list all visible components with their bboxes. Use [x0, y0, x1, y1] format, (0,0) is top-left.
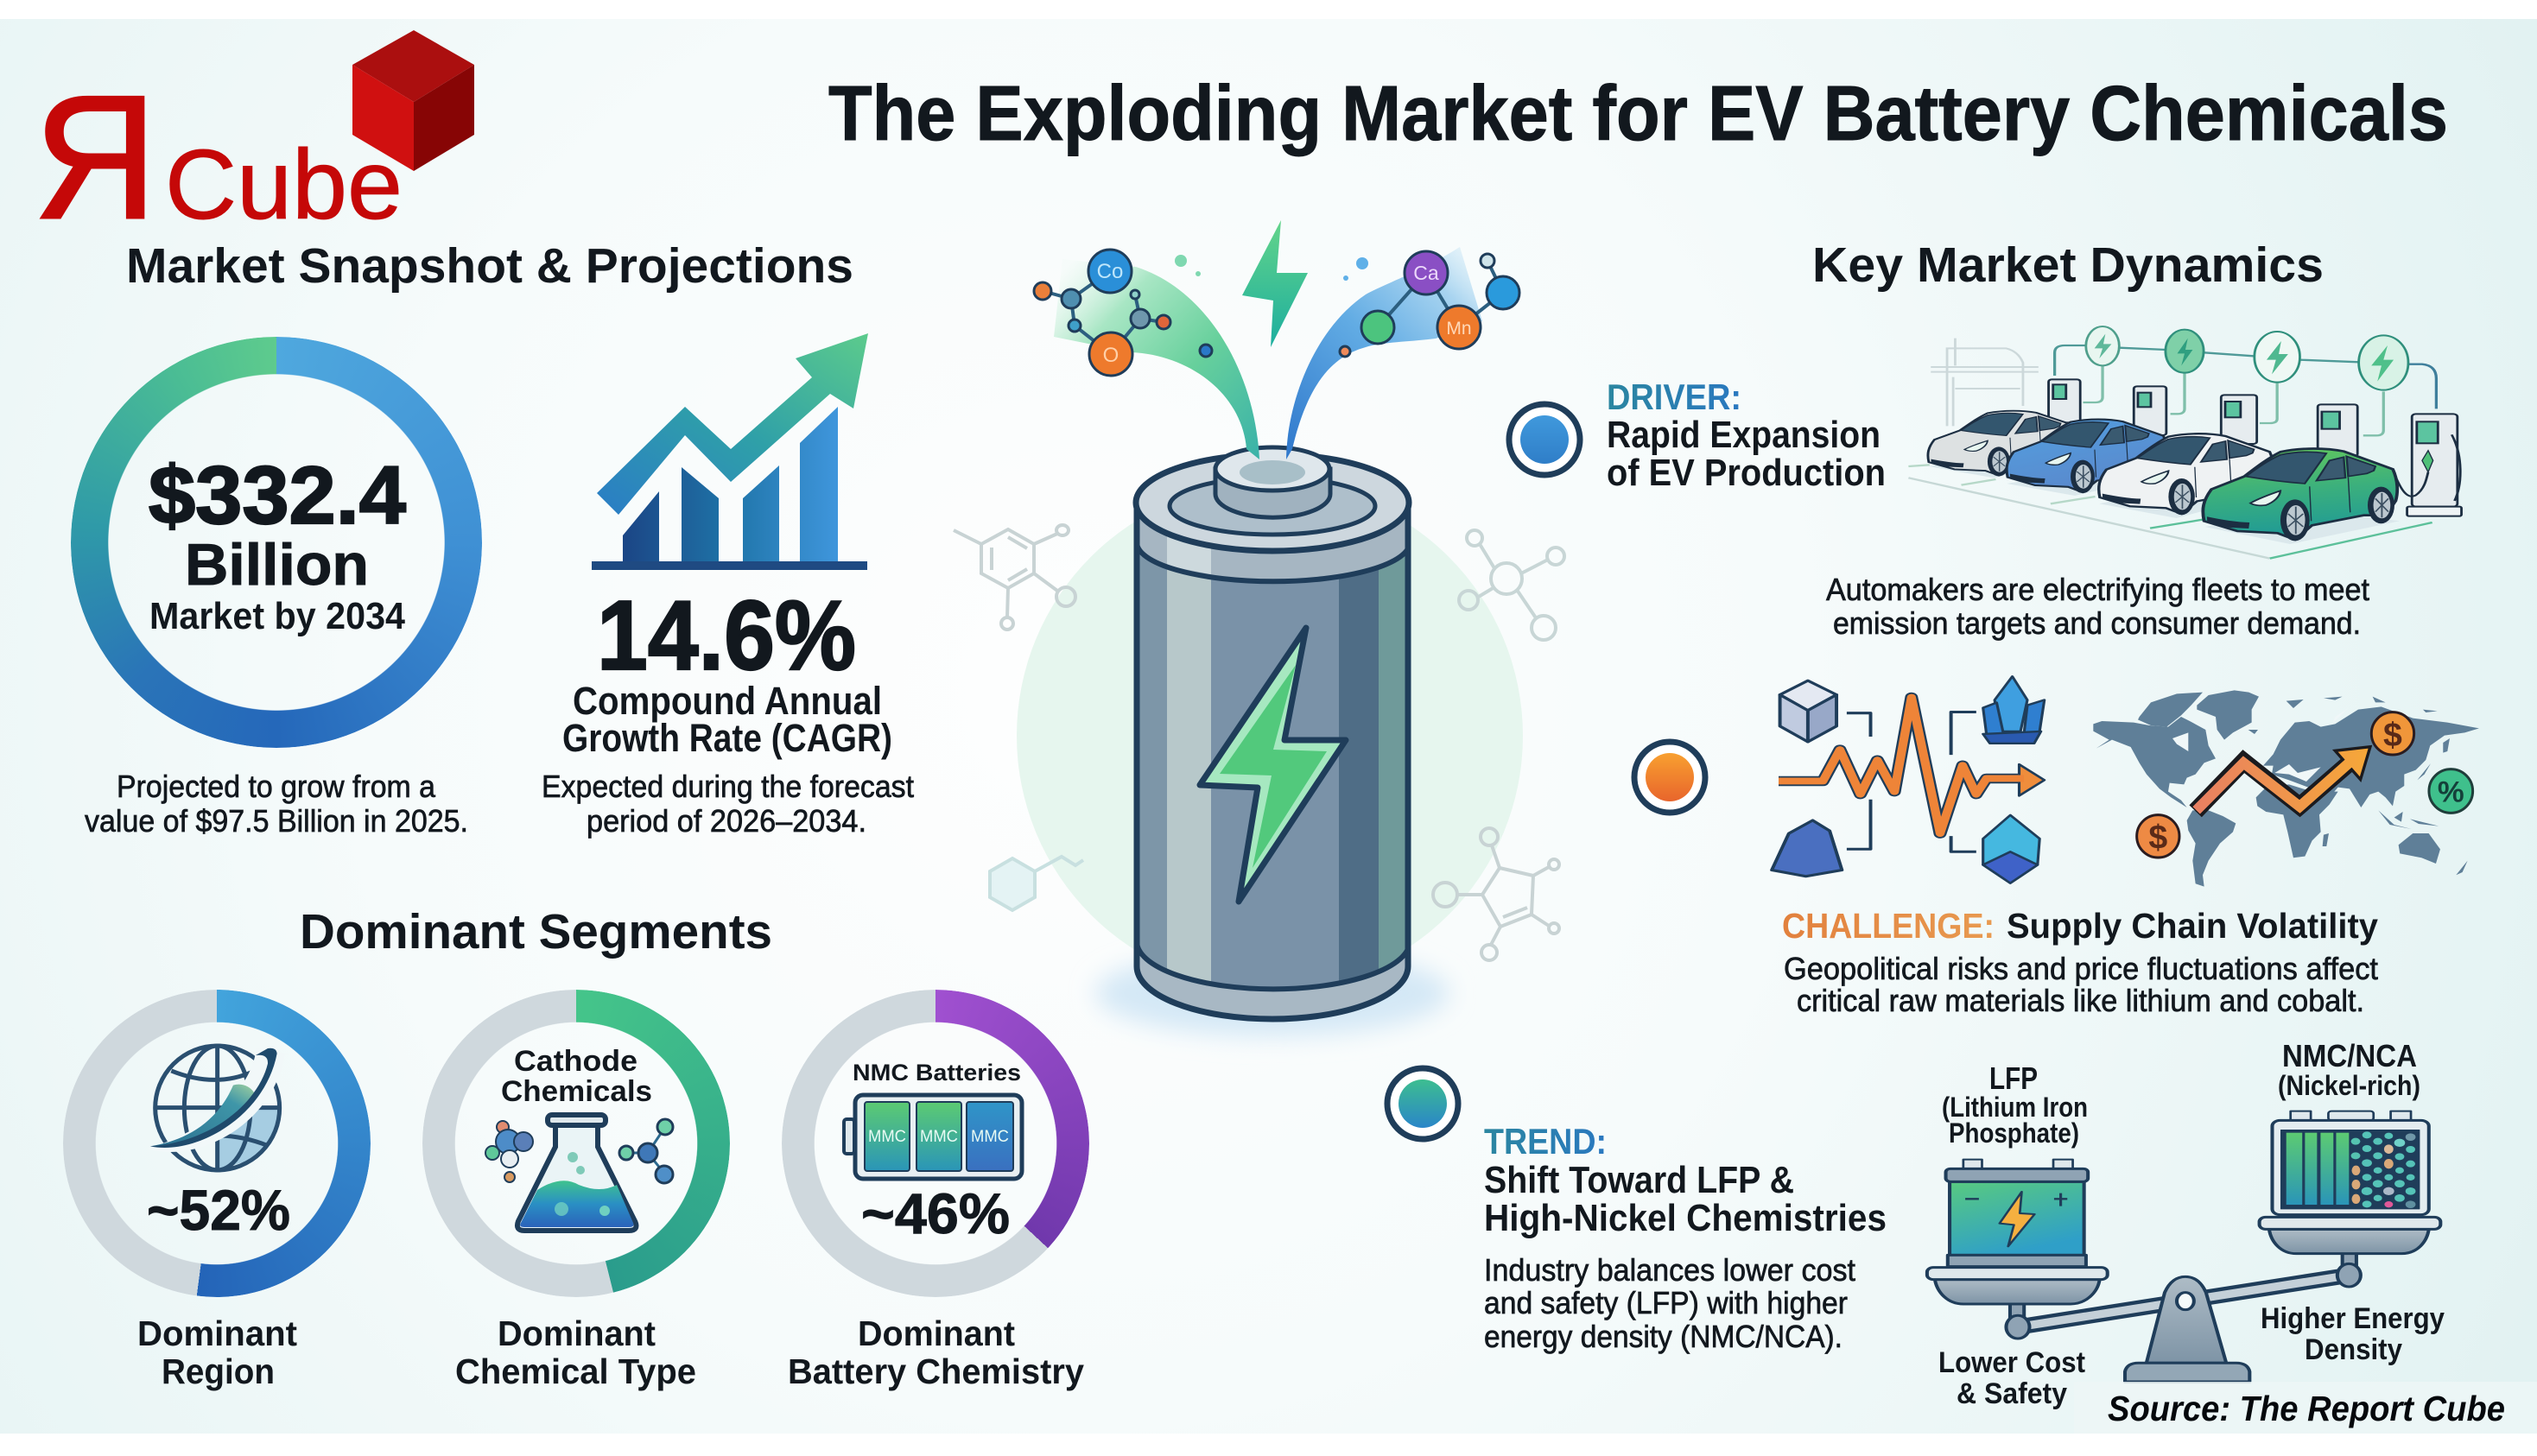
- coin: percent: [2429, 769, 2473, 813]
- panel: CAGR: [542, 333, 914, 839]
- faint molecule: hub: [1459, 530, 1564, 640]
- driver title: [1607, 414, 1886, 494]
- floating dots: [1175, 255, 1368, 281]
- panel: trend: [1387, 1038, 2445, 1410]
- molecule right: [1340, 251, 1519, 357]
- right stem and joint: [2337, 1252, 2361, 1287]
- description: Projected to grow from a: [117, 769, 436, 804]
- segment label: [455, 1314, 696, 1391]
- trend title: [1484, 1159, 1887, 1239]
- molecule left: Co: [1097, 260, 1123, 283]
- power nodes: [2086, 326, 2408, 390]
- logo mirrored R letter: Я: [34, 60, 157, 256]
- bullet: trend: [1387, 1068, 1458, 1139]
- description: Expected during the forecast: [542, 769, 914, 804]
- icon: left molecule: [485, 1121, 533, 1182]
- faint molecule: benzene ring: [954, 525, 1075, 630]
- donut ring: [71, 337, 482, 748]
- left pan: [1927, 1268, 2108, 1304]
- faint building: [1931, 339, 2039, 426]
- share value: ~46%: [861, 1181, 1010, 1245]
- donut ring 52 percent: [63, 990, 371, 1297]
- charging network wires: [2055, 345, 2436, 435]
- central battery illustration: [954, 220, 1564, 1036]
- description: value of $97.5 Billion in 2025.: [85, 803, 468, 839]
- driver title: of EV Production: [1607, 452, 1886, 494]
- value: 14.6%: [597, 581, 856, 691]
- label: NMC NCA: [2278, 1038, 2420, 1101]
- trend title: High-Nickel Chemistries: [1484, 1197, 1887, 1239]
- green chemical stream: [1054, 259, 1259, 459]
- floor shadow: [1095, 950, 1449, 1036]
- fulcrum: [2125, 1276, 2249, 1382]
- inner label: NMC Batteries: [853, 1060, 1021, 1086]
- label: higher energy density: Higher Energy: [2261, 1302, 2445, 1335]
- top lightning bolt: [1242, 220, 1308, 347]
- panel: dominant battery chemistry: [782, 990, 1089, 1391]
- trend description: Industry balances lower cost: [1484, 1252, 1855, 1288]
- challenge title: CHALLENGE:: [1782, 906, 1995, 946]
- logo word Cube: Cube: [165, 130, 403, 240]
- challenge title: [1782, 906, 2378, 946]
- bullet: driver: [1509, 404, 1580, 475]
- label: lower cost and safety: & Safety: [1957, 1377, 2067, 1410]
- driver description: [1826, 572, 2369, 641]
- heading: dominant segments: Dominant Segments: [300, 904, 772, 959]
- bullet: challenge: [1634, 742, 1705, 813]
- inner label: Chemicals: [501, 1075, 652, 1108]
- share value: ~52%: [147, 1178, 290, 1242]
- world map: [2093, 690, 2479, 887]
- segment label: Region: [162, 1352, 275, 1391]
- panel: driver: [1509, 326, 2462, 641]
- segment label: Chemical Type: [455, 1352, 696, 1391]
- panel: dominant chemical type: [422, 990, 730, 1391]
- challenge description: Geopolitical risks and price fluctuations affect: [1784, 951, 2378, 986]
- challenge description: [1784, 951, 2378, 1018]
- description: [85, 769, 468, 839]
- mineral crystal: [1983, 676, 2045, 744]
- icon: right molecule: [619, 1119, 673, 1183]
- source credit: Source: The Report Cube: [2108, 1389, 2505, 1428]
- label: LFP: [1942, 1060, 2088, 1149]
- car: blue: [2007, 420, 2167, 493]
- driver label: DRIVER:: [1607, 377, 1741, 417]
- trend description: [1484, 1252, 1855, 1354]
- panel: dominant region: [63, 990, 371, 1391]
- icon: NMC battery pack: [844, 1095, 1022, 1179]
- charger posts: [2049, 379, 2462, 516]
- car: green: [2203, 448, 2397, 541]
- inner label: [501, 1045, 652, 1108]
- ring caption: Market by 2034: [149, 595, 405, 637]
- volatility arrow: [1779, 698, 2045, 833]
- coin: dollar top: $: [2383, 716, 2402, 754]
- battery lightning bolt: [1200, 628, 1346, 902]
- icon: red cube: [352, 30, 474, 171]
- molecule left: O: [1103, 344, 1119, 367]
- label: LFP: (Lithium Iron: [1942, 1092, 2088, 1123]
- car floor shadows: [1929, 455, 2400, 544]
- label: lower cost and safety: [1938, 1346, 2085, 1410]
- molecule right: Ca: [1413, 262, 1439, 284]
- label: lower cost and safety: Lower Cost: [1938, 1346, 2085, 1379]
- parking ground: [1908, 465, 2432, 559]
- panel: challenge: [1634, 676, 2479, 1018]
- faint molecule: pentagon: [1433, 828, 1559, 960]
- title: The Exploding Market for EV Battery Chemicals: [828, 71, 2448, 157]
- CAGR label: [562, 679, 892, 760]
- donut ring chemical type: [422, 990, 730, 1297]
- trend description: and safety (LFP) with higher: [1484, 1285, 1848, 1320]
- coin: percent: %: [2438, 776, 2464, 809]
- heading: key market dynamics: Key Market Dynamics: [1812, 237, 2324, 293]
- challenge title: Supply Chain Volatility: [2007, 906, 2378, 946]
- left stem and joint: [2006, 1302, 2030, 1339]
- coin: dollar bottom: [2137, 815, 2179, 858]
- icon: globe with swoosh: [147, 1046, 285, 1170]
- blue chemical stream: [1286, 247, 1482, 459]
- driver description: emission targets and consumer demand.: [1833, 605, 2361, 641]
- inner label: Cathode: [514, 1045, 637, 1078]
- CAGR label: Compound Annual: [573, 679, 882, 723]
- CAGR label: Growth Rate (CAGR): [562, 716, 892, 760]
- NMC battery: [2272, 1111, 2429, 1215]
- icon: NMC battery pack: MMC: [920, 1128, 958, 1146]
- illustration: EV charging row: [1908, 326, 2462, 559]
- molecule right: Mn: [1446, 319, 1472, 339]
- segment label: Dominant: [137, 1314, 297, 1353]
- trend title: Shift Toward LFP &: [1484, 1159, 1794, 1201]
- driver title: Rapid Expansion: [1607, 414, 1881, 456]
- label: LFP: Phosphate): [1949, 1117, 2079, 1149]
- right pan: [2260, 1217, 2440, 1254]
- donut ring 46 percent: [782, 990, 1089, 1297]
- car: white: [2099, 434, 2274, 515]
- segment label: [788, 1314, 1084, 1391]
- value: $332.4: [149, 450, 406, 541]
- icon: flask: [517, 1115, 636, 1231]
- driver description: Automakers are electrifying fleets to meet: [1826, 572, 2369, 607]
- rising cost arrow: [2196, 747, 2370, 811]
- illustration: balance scale: [1927, 1111, 2440, 1382]
- label: LFP: LFP: [1989, 1060, 2038, 1096]
- unit: Billion: [185, 532, 369, 598]
- illustration: raw materials with volatile price line: [1772, 676, 2045, 883]
- car: grey: [1928, 411, 2077, 476]
- heading: market snapshot and projections: Market Snapshot & Projections: [126, 238, 853, 294]
- icon: NMC battery pack: MMC: [971, 1128, 1009, 1146]
- mineral rock: [1772, 820, 1842, 877]
- challenge description: critical raw materials like lithium and cobalt.: [1797, 983, 2364, 1018]
- faint molecule: hexagon chain: [990, 857, 1083, 910]
- connector brackets: [1847, 712, 1976, 851]
- mineral gem: [1983, 815, 2039, 883]
- molecule left: [1034, 250, 1212, 376]
- label: NMC NCA: (Nickel-rich): [2278, 1070, 2420, 1101]
- icon: NMC battery pack: MMC: [868, 1128, 906, 1146]
- label: higher energy density: [2261, 1302, 2445, 1366]
- label: higher energy density: Density: [2305, 1333, 2402, 1366]
- scale beam: [2018, 1276, 2349, 1327]
- LFP battery: [1946, 1160, 2088, 1267]
- segment label: Battery Chemistry: [788, 1352, 1084, 1391]
- label: NMC NCA: NMC/NCA: [2282, 1038, 2417, 1073]
- description: period of 2026–2034.: [587, 803, 866, 839]
- trend description: energy density (NMC/NCA).: [1484, 1319, 1842, 1354]
- coin: dollar top: [2371, 712, 2414, 755]
- segment label: Dominant: [498, 1314, 656, 1353]
- coin: dollar bottom: $: [2148, 819, 2167, 857]
- logo: RCube: [34, 30, 474, 256]
- green halo: [1017, 483, 1523, 989]
- icon: growth chart with arrow: [592, 333, 868, 570]
- battery body: [1136, 447, 1410, 1028]
- trend label: TREND:: [1484, 1121, 1607, 1162]
- segment label: [137, 1314, 297, 1391]
- illustration: world map with cost arrow: [2093, 690, 2479, 887]
- mineral cube: [1780, 681, 1836, 742]
- description: [542, 769, 914, 839]
- panel: market size ring: [71, 337, 482, 839]
- segment label: Dominant: [858, 1314, 1015, 1353]
